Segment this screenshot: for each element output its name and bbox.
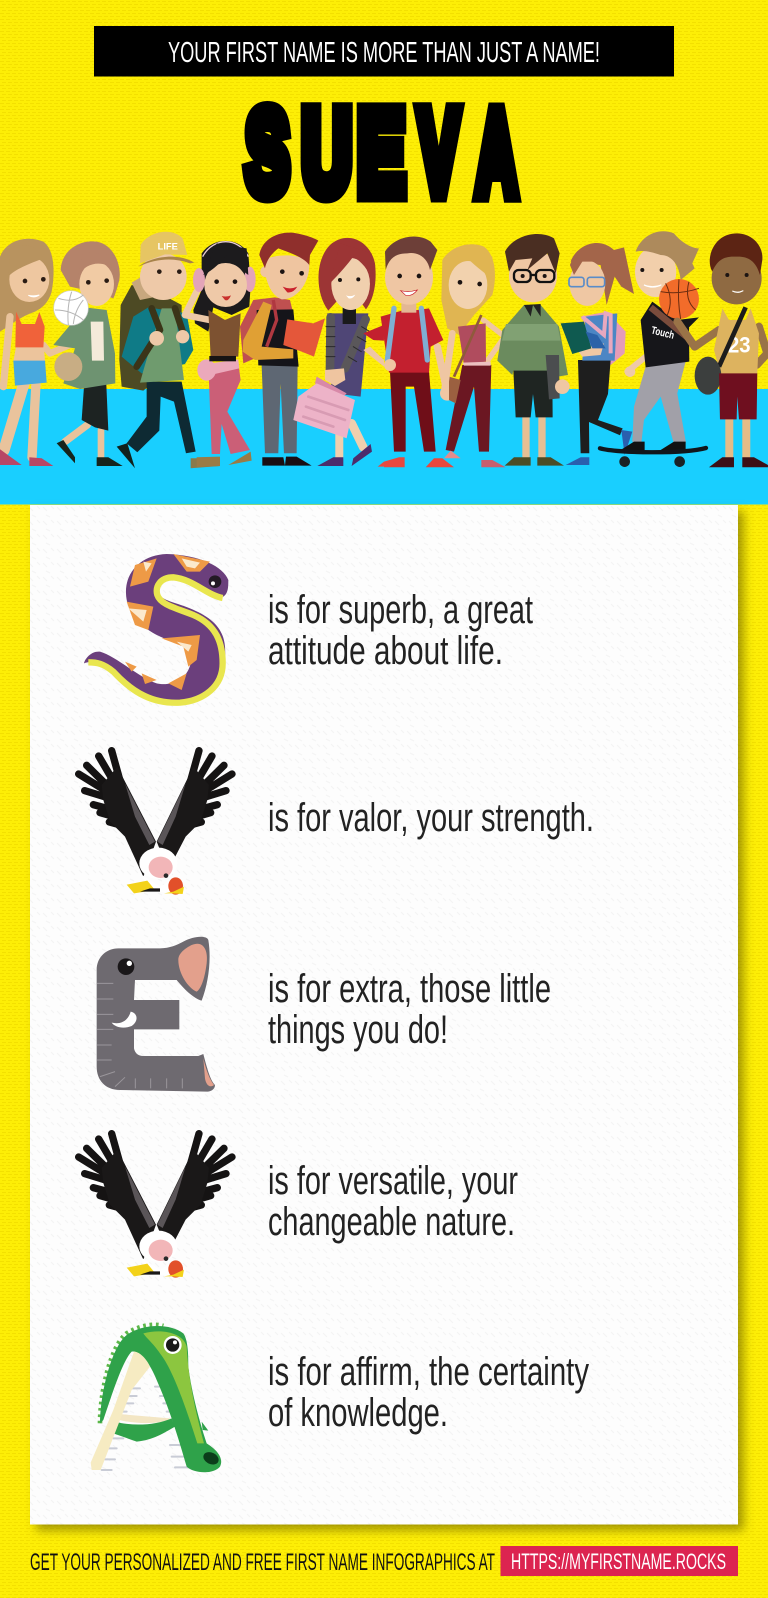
row 2: V bbox=[79, 751, 594, 895]
person 3: backpacker with cap: LIFE bbox=[158, 241, 178, 251]
left six people bbox=[0, 232, 384, 468]
person 12: boy in tan jersey bbox=[677, 233, 768, 467]
title: name: V bbox=[419, 86, 459, 218]
person 10: girl with tablet bbox=[561, 243, 634, 465]
title: name: E bbox=[358, 86, 405, 218]
title: name bbox=[246, 86, 517, 219]
text: A lines: of knowledge. bbox=[268, 1391, 448, 1435]
text: S line: is for superb, a great bbox=[268, 588, 533, 632]
person 5: boy with book bbox=[240, 233, 325, 466]
icon: vulture letter V bbox=[79, 751, 232, 895]
person 9: boy with glasses bbox=[497, 234, 570, 466]
text: V lines: is for versatile, your bbox=[268, 1159, 518, 1203]
blue floor band bbox=[0, 389, 768, 504]
person 12: boy in tan jersey: 23 bbox=[728, 333, 751, 358]
person 2: girl with volleyball bbox=[53, 241, 123, 466]
title: name: U bbox=[302, 88, 351, 219]
icon: crocodile letter A bbox=[91, 1325, 221, 1472]
row 4: V bbox=[79, 1134, 518, 1278]
header banner bbox=[94, 26, 674, 76]
title: name: S bbox=[246, 88, 289, 219]
person 4: girl with headphones bbox=[185, 241, 256, 467]
person 3: backpacker with cap bbox=[117, 232, 220, 468]
text: S line: attitude about life. bbox=[268, 629, 503, 673]
person 11: skateboarder with basketball bbox=[600, 231, 706, 467]
illustration: group of young people bbox=[0, 231, 768, 468]
icon: snake letter S bbox=[84, 554, 228, 705]
right six people bbox=[381, 231, 768, 467]
icon: elephant letter E bbox=[97, 937, 215, 1092]
row 5: A bbox=[91, 1325, 589, 1472]
person 1: girl in orange top bbox=[0, 239, 75, 466]
text: A lines: is for affirm, the certainty bbox=[268, 1350, 589, 1394]
text: E lines: is for extra, those little bbox=[268, 967, 551, 1011]
person 8: blonde girl bbox=[441, 244, 506, 467]
row 3: E bbox=[97, 937, 551, 1092]
person 6: girl with pink bag bbox=[293, 238, 384, 467]
shirt lettering: Touch bbox=[650, 325, 675, 342]
text: V line: is for valor, your strength. bbox=[268, 796, 594, 840]
text: V lines: changeable nature. bbox=[268, 1200, 515, 1244]
person 7: boy in red shirt bbox=[381, 236, 455, 467]
row 1: S bbox=[84, 554, 533, 705]
icon: vulture letter V bbox=[79, 1134, 232, 1278]
main white panel bbox=[30, 505, 738, 1524]
title: name: A bbox=[476, 86, 517, 219]
text: E lines: things you do! bbox=[268, 1008, 448, 1052]
